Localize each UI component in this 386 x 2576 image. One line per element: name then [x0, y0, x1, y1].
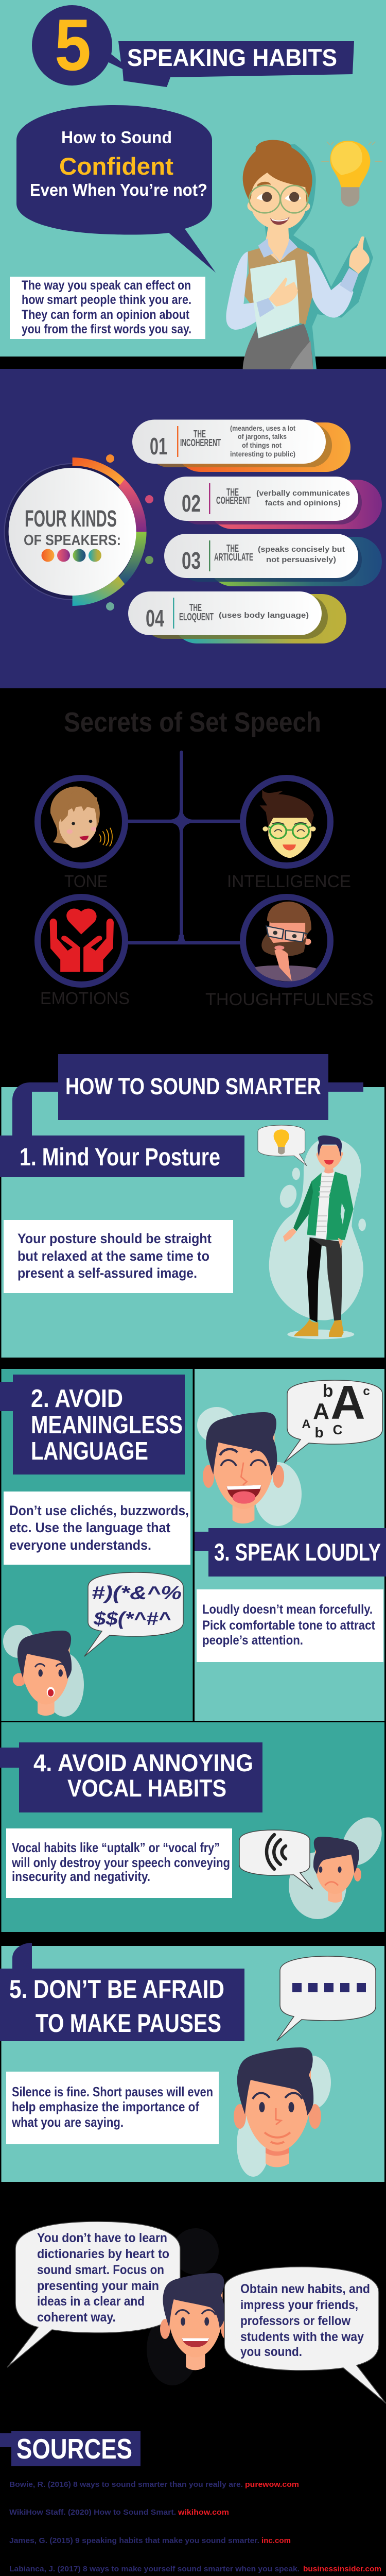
intro text box: you from the first words you say. [22, 322, 191, 336]
illustration: smiling man [234, 2047, 331, 2177]
speech bubble with symbols: #)(*&^% [92, 1582, 182, 1603]
left leg [307, 1238, 322, 1323]
speaker 03: not persuasively) [266, 555, 336, 564]
torso [307, 1172, 354, 1240]
icon: speaking woman [50, 786, 112, 848]
sources heading: SOURCES [16, 2433, 132, 2465]
icon: hands holding heart [50, 909, 114, 972]
heading 1 [0, 1136, 244, 1177]
illustration: woman with light bulb [226, 140, 382, 369]
illustration: surprised man [3, 1625, 84, 1717]
background blob [269, 1138, 363, 1320]
icon: bearded man thinking [255, 902, 317, 981]
face [248, 173, 310, 230]
connector pipe [12, 1943, 32, 1971]
sleeve gap [341, 1203, 345, 1225]
heading 5: 5. DON’T BE AFRAID [9, 1975, 224, 2004]
text box 1: but relaxed at the same time to [17, 1248, 209, 1264]
speaker 01: (meanders, uses a lot [230, 424, 295, 432]
source 3: inc.com [261, 2536, 291, 2545]
eyes and glasses [249, 182, 308, 225]
title number badge [32, 4, 112, 86]
right speech bubble: professors or fellow [240, 2314, 350, 2328]
speaker 01: of things not [242, 441, 282, 449]
speaker 02: COHERENT [216, 495, 251, 506]
text box 5: help emphasize the importance of [12, 2099, 199, 2114]
item: tone [38, 778, 125, 891]
speaker 01: 01 [150, 433, 167, 460]
hair [318, 1136, 342, 1157]
speech bubble with sound waves [239, 1830, 313, 1889]
illustration: worried man [289, 1810, 386, 1919]
label: THOUGHTFULNESS [205, 990, 374, 1009]
neck [324, 1166, 334, 1173]
right speech bubble: students with the way [240, 2330, 364, 2344]
panel: intro [0, 0, 386, 357]
hub circle [5, 454, 153, 611]
speaker 04: ELOQUENT [179, 612, 214, 623]
section heading [58, 1054, 328, 1120]
text box 3: people’s attention. [202, 1633, 303, 1648]
source 1: Bowie, R. (2016) 8 ways to sound smarter than you really are. [9, 2480, 243, 2489]
speech bubble with letters: A [313, 1399, 329, 1424]
head [317, 1145, 343, 1170]
panel: mind your posture [0, 1054, 384, 1358]
left speech bubble: sound smart. Focus on [37, 2263, 164, 2277]
panel: avoid annoying vocal habits [0, 1722, 386, 1932]
text box 1: Your posture should be straight [17, 1231, 212, 1246]
folder [250, 260, 300, 338]
speech bubble with letters: C [333, 1422, 343, 1437]
intro text box: The way you speak can effect on [22, 278, 191, 293]
connector pipe [12, 1082, 363, 1139]
skirt [243, 324, 313, 369]
heading: Secrets of Set Speech [64, 707, 321, 738]
text box 4 [6, 1828, 232, 1898]
speaker 03: THE [226, 543, 239, 554]
skirt highlight [290, 341, 313, 369]
intro text box: They can form an opinion about [22, 308, 190, 322]
heading 2 [0, 1375, 185, 1475]
heading 3 [195, 1528, 386, 1577]
neck [264, 225, 297, 263]
heading 4: VOCAL HABITS [67, 1774, 226, 1802]
left speech bubble: coherent way. [37, 2310, 116, 2325]
title banner [106, 41, 354, 87]
speaker 02: (verbally communicates [256, 489, 350, 498]
text box 4: insecurity and negativity. [12, 1869, 150, 1884]
speaker 04: (uses body language) [219, 611, 309, 620]
panel: don't be afraid to make pauses [0, 1943, 384, 2182]
heading 2: 2. AVOID [31, 1385, 123, 1413]
section heading: HOW TO SOUND SMARTER [65, 1073, 321, 1099]
source 2: WikiHow Staff. (2020) How to Sound Smart. [9, 2508, 176, 2517]
title number badge: 5 [55, 4, 91, 86]
left speech bubble: dictionaries by heart to [37, 2247, 169, 2261]
speech bubble with letters: b [314, 1425, 324, 1440]
headline speech bubble: Confident [59, 152, 173, 180]
speaker 01 [132, 419, 350, 472]
cuffs [256, 268, 359, 317]
speaker 04 [128, 591, 346, 643]
speaker 04: THE [189, 602, 202, 614]
text box 2: etc. Use the language that [9, 1520, 170, 1535]
closing section [7, 2222, 386, 2403]
speaker 04: 04 [146, 605, 164, 632]
speaker 01: INCOHERENT [180, 437, 221, 449]
text box 5 [6, 2072, 219, 2144]
item: emotions [38, 897, 130, 1008]
bubble with bulb [258, 1125, 307, 1166]
illustration: laughing man [197, 1407, 302, 1526]
right speech bubble: Obtain new habits, and [240, 2282, 370, 2296]
sources section [0, 2431, 381, 2576]
intro text box: how smart people think you are. [22, 293, 191, 307]
left speech bubble: You don’t have to learn [37, 2231, 167, 2245]
smile [324, 1160, 334, 1164]
headline speech bubble [16, 105, 216, 273]
icon: man with glasses [260, 790, 316, 858]
speech bubble with letters: b [323, 1381, 333, 1401]
headline speech bubble: How to Sound [61, 128, 172, 147]
speaker 03: 03 [182, 547, 201, 574]
text box 4: will only destroy your speech conveying [11, 1855, 230, 1870]
heading 4: 4. AVOID ANNOYING [33, 1749, 253, 1776]
heading 1: 1. Mind Your Posture [20, 1144, 220, 1171]
text box 4: Vocal habits like “uptalk” or “vocal fry” [12, 1840, 220, 1855]
faint blobs [147, 2228, 219, 2385]
vest [241, 246, 313, 325]
holding hand [269, 277, 298, 307]
speaker 01: THE [194, 429, 206, 440]
item: thoughtfulness [205, 897, 374, 1009]
heading 4 [0, 1742, 262, 1812]
label: INTELLIGENCE [227, 872, 351, 891]
source 4: businessinsider.com [303, 2565, 381, 2573]
source 1: purewow.com [245, 2480, 299, 2489]
speech bubble with letters: A [302, 1417, 311, 1431]
connector node [171, 810, 192, 833]
speaker 03: (speaks concisely but [258, 545, 345, 554]
text box 5: what you are saying. [11, 2114, 124, 2130]
right arm [307, 253, 354, 318]
pointing hand [349, 236, 370, 274]
heading 2: LANGUAGE [31, 1437, 148, 1465]
source 4: Labianca, J. (2017) 8 ways to make yourself sound smarter when you speak. [9, 2565, 300, 2573]
speaker 02 [164, 477, 382, 529]
speaker 03 [164, 534, 382, 586]
speech bubble with letters: A [330, 1376, 365, 1429]
hub circle: FOUR KINDS [25, 505, 117, 532]
left speech bubble [7, 2222, 180, 2367]
panel: four kinds of speakers [0, 369, 386, 688]
hub circle: OF SPEAKERS: [24, 532, 121, 549]
light bulb [321, 141, 382, 207]
speaker 02: 02 [182, 490, 201, 517]
hair [243, 140, 312, 202]
illustration: standing man [258, 1125, 366, 1339]
speech bubble with symbols [84, 1572, 183, 1656]
label: EMOTIONS [40, 989, 130, 1008]
left speech bubble: presenting your main [37, 2279, 159, 2293]
speech bubble with pause dots [277, 1956, 376, 2041]
right leg [310, 1238, 342, 1320]
speech bubble with symbols: $$(*^#^ [93, 1608, 171, 1629]
right speech bubble [224, 2267, 386, 2403]
illustration: smiling man [160, 2273, 231, 2370]
text box 1: present a self-assured image. [17, 1265, 197, 1281]
text box 2 [4, 1492, 190, 1565]
intro text box [10, 277, 205, 339]
text box 5: Silence is fine. Short pauses will even [12, 2084, 213, 2099]
label: TONE [64, 872, 108, 891]
source 2: wikihow.com [178, 2508, 229, 2517]
headline speech bubble: Even When You’re not? [30, 180, 207, 199]
speech bubble with letters: c [363, 1384, 370, 1398]
source 3: James, G. (2015) 9 speaking habits that make you sound smarter. [9, 2536, 259, 2545]
text box 1 [4, 1220, 233, 1293]
heading 5: TO MAKE PAUSES [36, 2009, 221, 2038]
panel: avoid meaningless language [0, 1369, 192, 1721]
hands [283, 1228, 343, 1248]
speaker 01: interesting to public) [230, 450, 295, 458]
panel: secrets of set speech [38, 707, 374, 1009]
right speech bubble: you sound. [240, 2345, 302, 2359]
speech bubble with letters [284, 1376, 382, 1463]
text box 2: Don’t use clichés, buzzwords, [9, 1503, 189, 1518]
speaker 03: ARTICULATE [214, 552, 253, 563]
collar [258, 239, 297, 263]
shirt [315, 1172, 335, 1240]
title banner: SPEAKING HABITS [127, 44, 337, 71]
left arm [226, 251, 261, 330]
speaker 01: of jargons, talks [238, 432, 287, 440]
connector lines [128, 752, 240, 943]
connector junction [175, 936, 188, 943]
item: intelligence [227, 778, 351, 891]
right speech bubble: impress your friends, [240, 2298, 358, 2312]
heading 5 [0, 1969, 244, 2041]
shoes [294, 1319, 344, 1337]
text box 3 [197, 1589, 383, 1662]
text box 2: everyone understands. [9, 1537, 151, 1553]
dark sleeve [293, 1181, 313, 1231]
panel: speak loudly [195, 1369, 386, 1721]
heading 2: MEANINGLESS [31, 1411, 183, 1439]
woman shadow [243, 144, 373, 369]
left speech bubble: ideas in a clear and [37, 2294, 145, 2309]
speaker 02: facts and opinions) [265, 499, 341, 507]
speaker 02: THE [226, 487, 239, 498]
